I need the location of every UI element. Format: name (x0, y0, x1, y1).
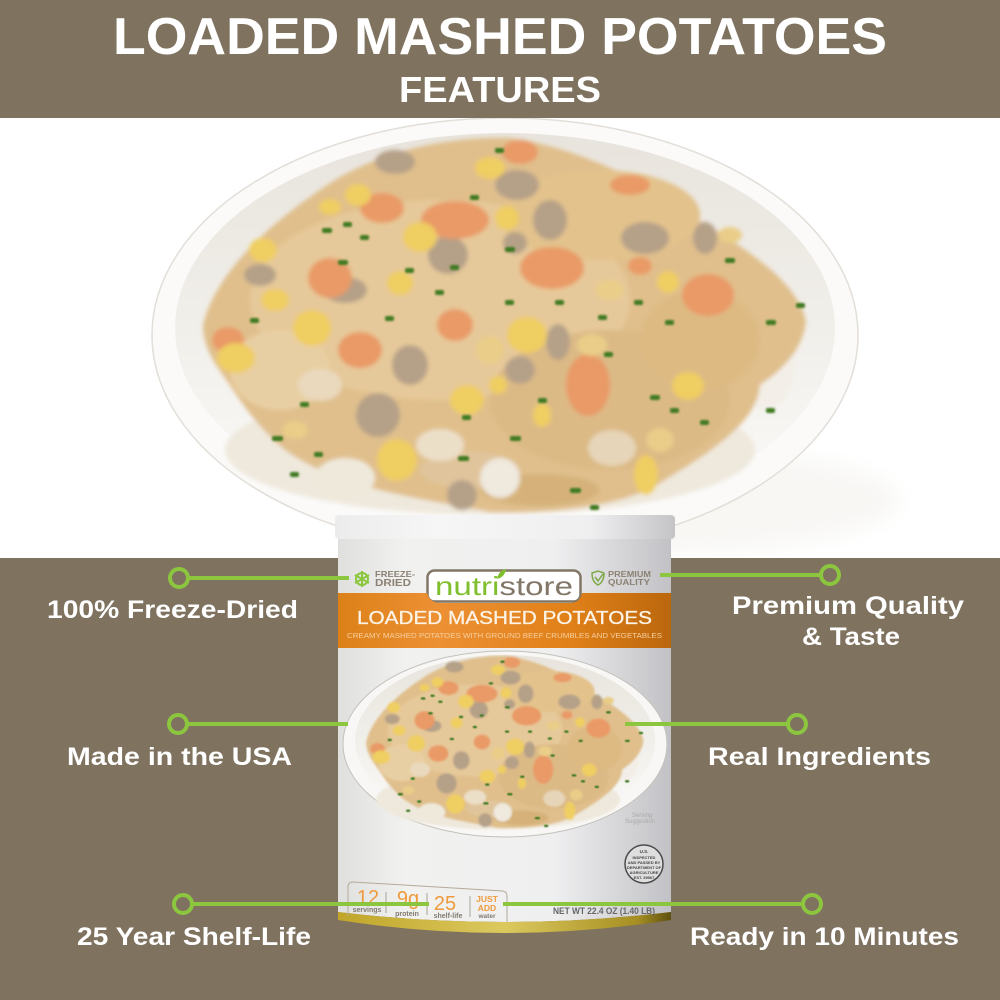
icon: shield check (592, 571, 604, 585)
connector (625, 715, 806, 733)
food: sauce, beef, carrots, corn and chives (203, 138, 806, 515)
serving suggestion: Serving (632, 813, 652, 819)
can info strip (348, 882, 507, 922)
plate well (175, 133, 835, 523)
shelf life: 25 (434, 893, 456, 915)
can info strip: shelf-life (434, 913, 462, 920)
premium quality badge (592, 570, 651, 587)
band description: CREAMY MASHED POTATOES WITH GROUND BEEF CRUMBLES AND VEGETABLES (347, 631, 662, 640)
gold can base (338, 912, 671, 933)
label: Ready in 10 Minutes (690, 923, 959, 951)
callout: Real Ingredients (625, 715, 931, 771)
USDA inspection seal: DEPARTMENT OF (627, 865, 662, 870)
can lid (335, 515, 675, 539)
callout: Premium Quality and Taste (660, 566, 964, 651)
label line one: Premium Quality (732, 592, 964, 620)
label: 100% Freeze-Dried (47, 596, 298, 624)
strip outline (348, 882, 507, 922)
can info strip: water (478, 913, 496, 920)
lower brown panel (0, 558, 1000, 1000)
USDA inspection seal: INSPECTED (633, 855, 656, 860)
connector (503, 895, 821, 913)
small plate well (355, 655, 655, 827)
callout: Ready in 10 Minutes (503, 895, 959, 951)
connector (660, 566, 839, 584)
freeze-dried badge: DRIED (375, 577, 411, 589)
USDA inspection seal: AND PASSED BY (628, 860, 661, 865)
USDA inspection seal: EST. 39967 (634, 875, 655, 880)
protein: 9g (397, 888, 419, 910)
title: LOADED MASHED POTATOES (113, 8, 887, 66)
white photo background (0, 118, 1000, 558)
label: Made in the USA (67, 743, 292, 771)
small plate (343, 651, 667, 837)
band product name: LOADED MASHED POTATOES (357, 608, 652, 628)
orange product band (338, 593, 671, 648)
label: 25 Year Shelf-Life (77, 923, 311, 951)
can body (338, 538, 671, 922)
can info strip: ADD (478, 903, 496, 913)
plate with loaded mashed potatoes (152, 118, 858, 552)
nutristore logo (428, 569, 580, 602)
servings: 12 (357, 887, 379, 909)
can info strip: servings (353, 907, 382, 914)
subtitle: FEATURES (399, 69, 601, 110)
USDA inspection seal: U.S. (640, 849, 648, 854)
connector (169, 715, 348, 733)
freeze-dried text: FREEZE- (375, 569, 415, 579)
wordmark: nutri store (435, 571, 573, 601)
premium quality text: PREMIUM (608, 570, 651, 579)
logo outline (428, 570, 580, 602)
callout: 100% Freeze-Dried (47, 569, 349, 624)
plate drop shadow (340, 445, 900, 555)
icon: snowflake (355, 571, 369, 587)
label line two: & Taste (802, 623, 900, 651)
USDA inspection seal (625, 845, 663, 883)
can plate image (343, 651, 667, 837)
plate rim (152, 118, 858, 552)
label: Real Ingredients (708, 743, 931, 771)
product can (335, 515, 675, 933)
can info strip: protein (395, 911, 419, 918)
callout: 25 Year Shelf-Life (77, 895, 429, 951)
small plate food (366, 656, 643, 829)
product can: Suggestion (625, 819, 655, 825)
top title band (0, 0, 1000, 118)
connector (170, 569, 349, 587)
just add water: JUST (476, 894, 499, 904)
net weight: NET WT 22.4 OZ (1.40 LB) (553, 906, 655, 916)
USDA inspection seal: AGRICULTURE (630, 870, 659, 875)
freeze-dried badge (355, 569, 415, 589)
connector (174, 895, 429, 913)
callout: Made in the USA (67, 715, 348, 771)
leaf (497, 569, 506, 579)
premium quality badge: QUALITY (608, 578, 651, 587)
strip dividers (386, 892, 470, 917)
